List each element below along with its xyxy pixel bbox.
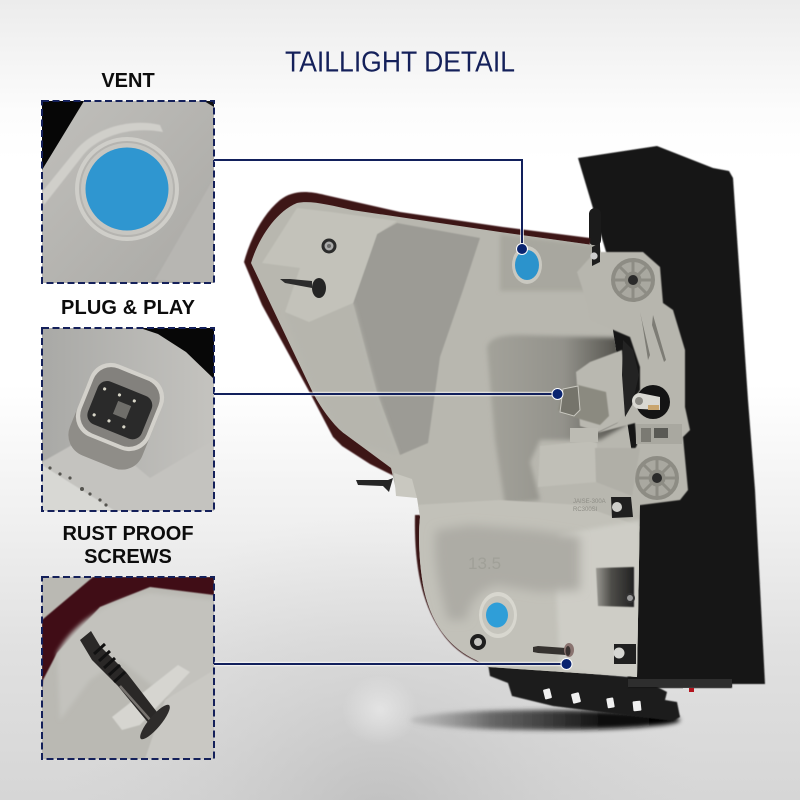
leader line: vent	[214, 160, 528, 254]
lower vent	[479, 592, 517, 638]
icon: screw	[80, 631, 174, 743]
lower stud	[533, 643, 574, 657]
icon: grommet and tube	[632, 385, 670, 419]
housing flat panel	[353, 223, 480, 455]
dark red lower lens rim	[415, 515, 500, 664]
icon: upper vent membrane	[515, 250, 539, 280]
upper left mount	[262, 208, 397, 322]
panel: rust proof screws	[42, 577, 214, 759]
mould text	[573, 499, 606, 513]
heading: plug and play: PLUG & PLAY	[61, 297, 196, 319]
light grey bracket	[577, 243, 690, 506]
left lobe shading	[334, 307, 378, 446]
panel: plug and play	[42, 328, 214, 511]
black back plate	[578, 146, 765, 692]
heading: rust proof screws: SCREWS	[84, 546, 172, 568]
lower light band	[418, 500, 640, 677]
heading: rust proof screws: RUST PROOF	[62, 523, 194, 545]
mould text: RC300SI	[573, 507, 598, 513]
heading: vent: VENT	[101, 70, 155, 92]
lower recess	[435, 525, 580, 620]
title: TAILLIGHT DETAIL	[285, 46, 515, 78]
leader line: plug and play	[214, 388, 563, 400]
icon: blue vent membrane	[86, 148, 168, 230]
icon: lower wheel boss	[637, 458, 677, 498]
dark slot	[596, 567, 634, 607]
icon: lower vent membrane	[486, 602, 508, 628]
lower mounting bracket	[488, 664, 680, 721]
heading: rust proof screws	[62, 523, 194, 568]
wiring connector	[558, 385, 609, 425]
top boss shading	[500, 234, 600, 291]
icon: upper wheel boss	[613, 260, 653, 300]
dark red lens rim	[244, 192, 590, 477]
icon: connector pins	[87, 381, 152, 440]
housing main body	[240, 190, 650, 690]
block under connector	[538, 441, 597, 487]
panel: vent	[42, 101, 214, 283]
leader line: rust proof screws	[214, 658, 572, 670]
embossed number: 13.5	[468, 554, 501, 573]
mould text: JAISE-300A	[573, 499, 606, 505]
upper vent boss	[512, 246, 542, 284]
lower right highlight	[556, 520, 640, 680]
taillight assembly	[240, 146, 765, 721]
housing screws	[470, 497, 636, 664]
raised boss beside connector	[576, 350, 628, 432]
ground shadow	[410, 710, 680, 730]
dark recess	[487, 335, 640, 505]
side mounting stud	[356, 473, 417, 498]
